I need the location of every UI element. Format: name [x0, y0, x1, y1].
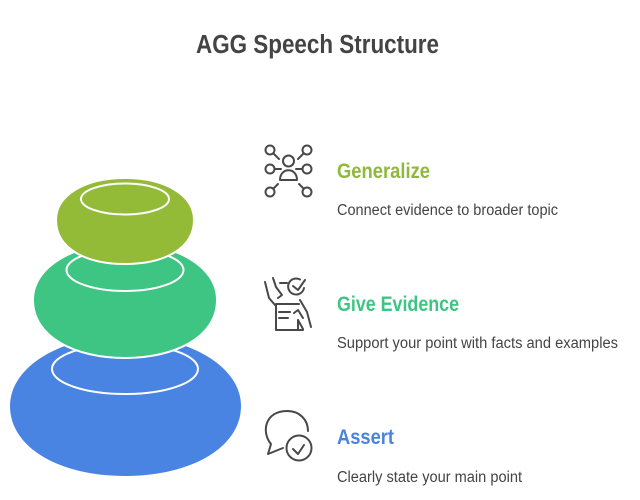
heading: generalize: Generalize	[337, 159, 430, 183]
heading: assert: Assert	[337, 425, 394, 449]
stone: assert (blue)	[10, 336, 241, 476]
icon: speech bubble with check	[266, 411, 312, 460]
title: AGG Speech Structure	[196, 31, 439, 59]
stone: generalize (olive)	[56, 178, 194, 264]
heading: give evidence: Give Evidence	[337, 292, 459, 316]
text: assert description: Clearly state your main point	[337, 469, 523, 486]
text: give evidence description: Support your point with facts and examples	[337, 335, 618, 352]
text: generalize description: Connect evidence to broader topic	[337, 202, 558, 219]
icon: person network	[266, 146, 312, 196]
stone: give evidence (green)	[33, 243, 217, 358]
icon: checklist document with hands	[265, 278, 311, 330]
stacked stones diagram	[10, 178, 241, 476]
